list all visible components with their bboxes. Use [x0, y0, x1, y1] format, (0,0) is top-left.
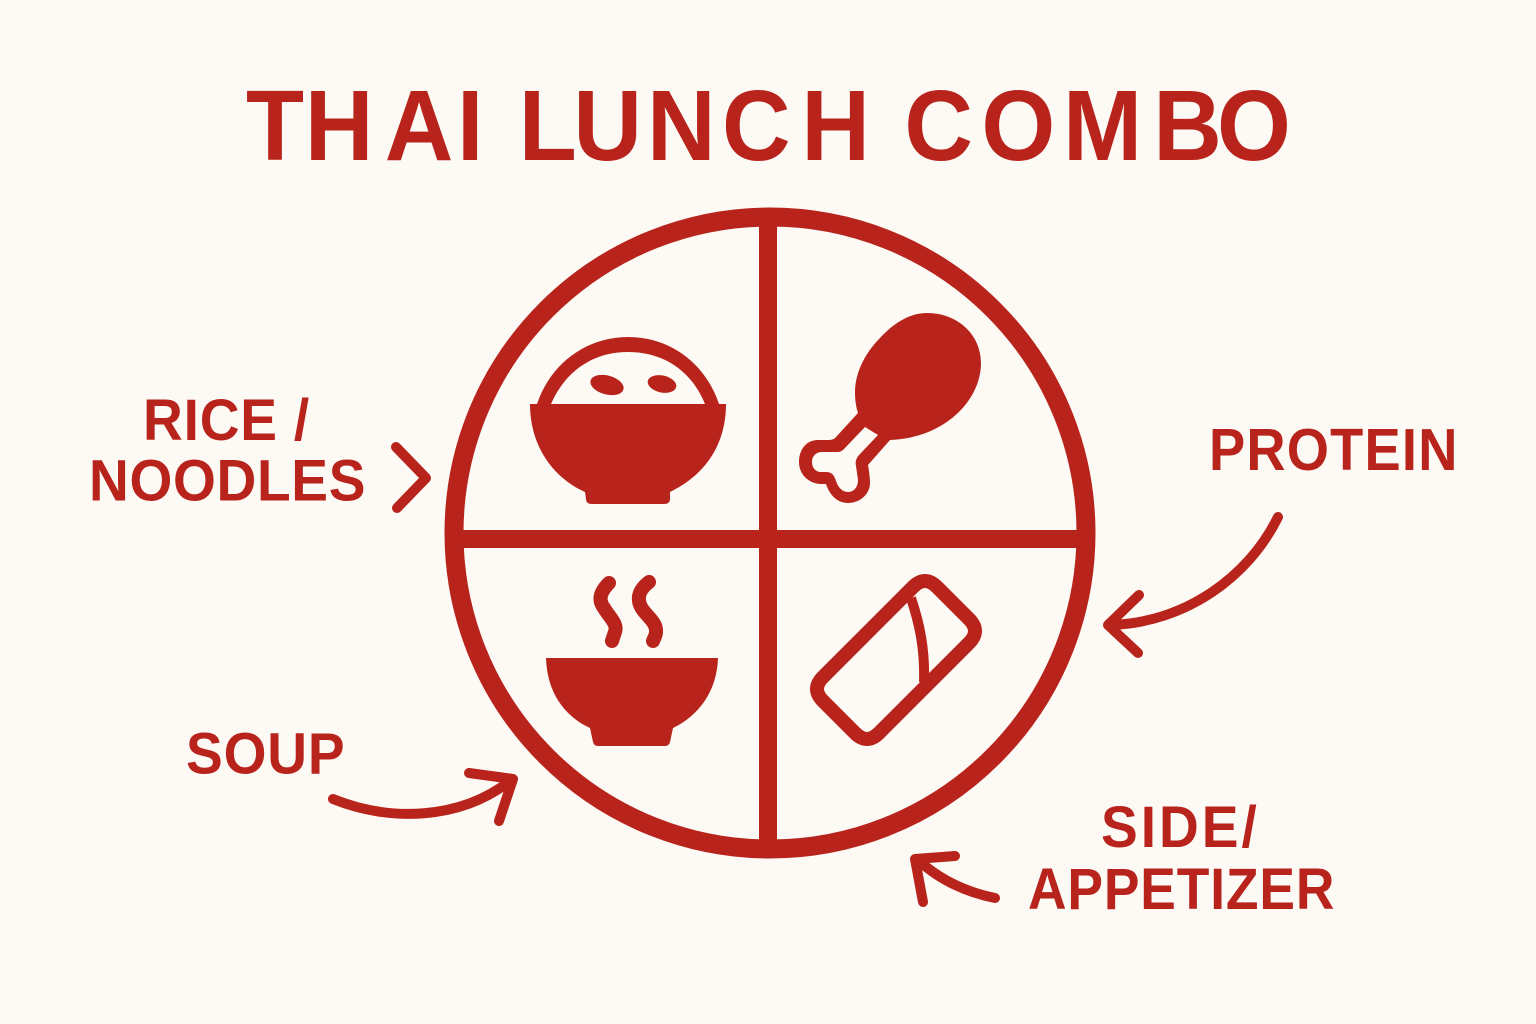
label: rice / noodles	[89, 388, 365, 513]
arrow: side / appetizer	[915, 856, 995, 902]
label: soup: SOUP	[186, 721, 345, 786]
arrow: soup	[333, 773, 513, 821]
label: protein: PROTEIN	[1209, 418, 1457, 484]
label: side / appetizer: APPETIZER	[1028, 857, 1334, 921]
label: rice / noodles: NOODLES	[89, 448, 365, 513]
icon: spring roll	[817, 581, 975, 739]
label: side / appetizer: SIDE/	[1101, 795, 1257, 859]
arrow: protein	[1108, 517, 1278, 653]
icon: chicken drumstick	[799, 313, 981, 503]
label: rice / noodles: RICE /	[143, 388, 310, 452]
arrow: rice / noodles	[396, 447, 426, 508]
title: THAI LUNCH COMBO	[246, 70, 1291, 182]
plate divided into four sections	[454, 217, 1086, 849]
label: side / appetizer	[1028, 795, 1334, 921]
icon: soup bowl with steam	[546, 582, 718, 746]
icon: rice bowl	[530, 337, 726, 504]
